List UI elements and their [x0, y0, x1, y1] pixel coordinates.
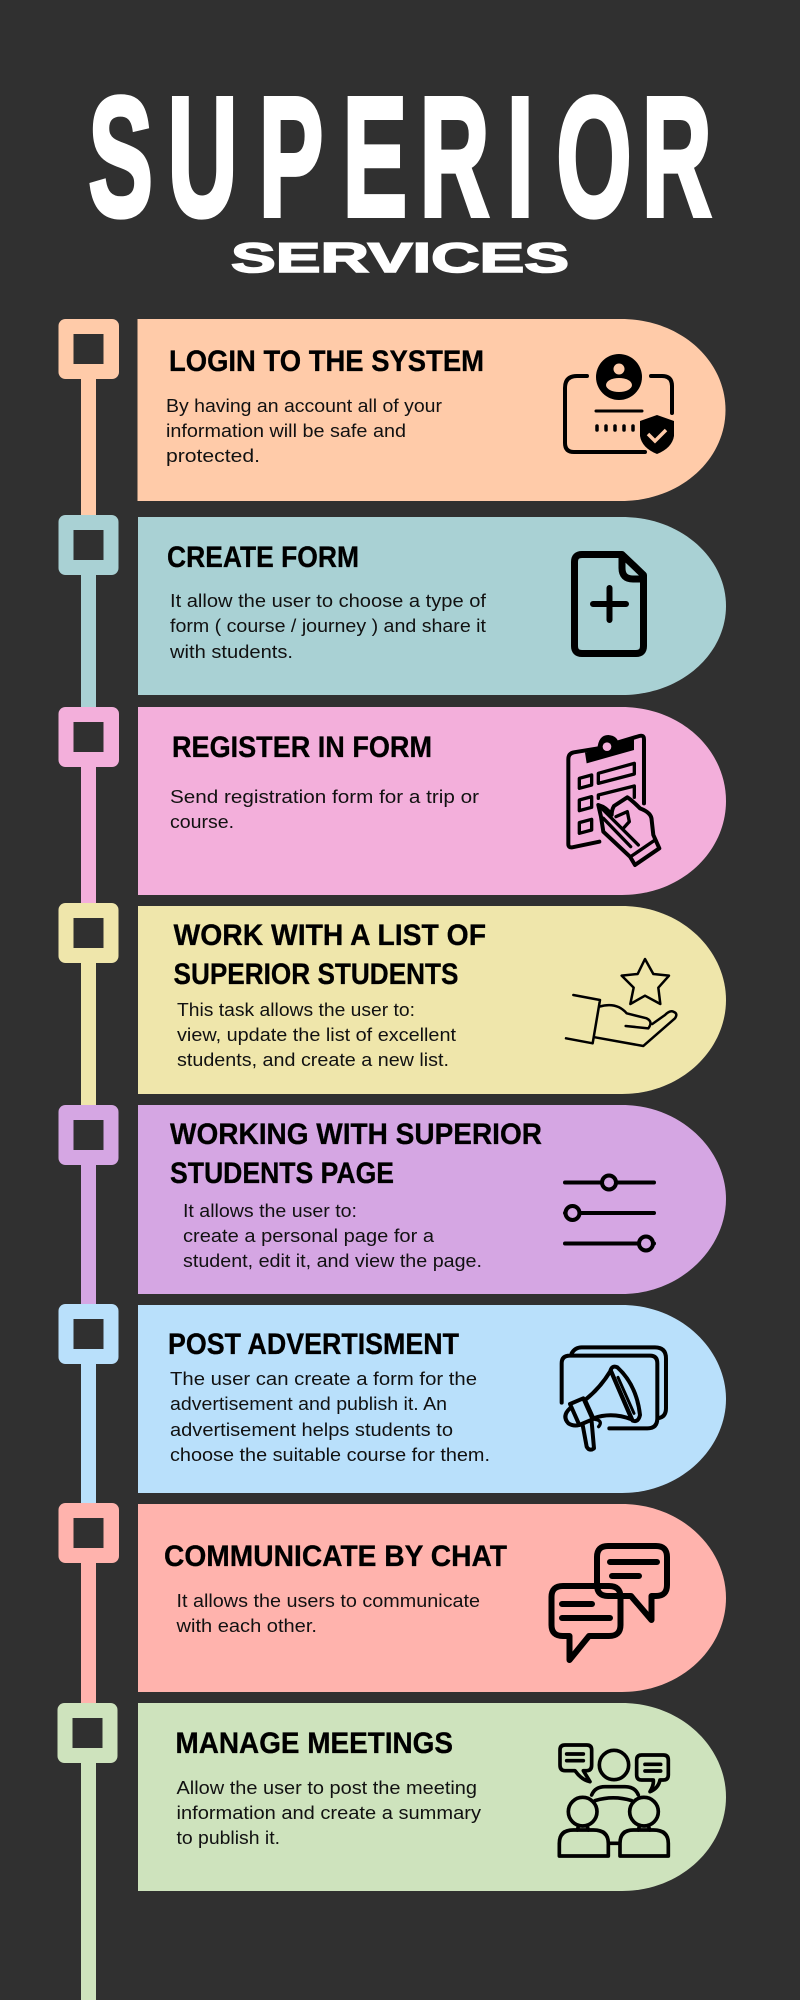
heading: STUDENTS PAGE: [170, 1157, 394, 1190]
heading: LOGIN TO THE SYSTEM: [169, 345, 484, 378]
text block: advertisement and publish it. An: [170, 1393, 447, 1414]
text block: [170, 1368, 490, 1465]
text block: with students.: [169, 641, 293, 662]
text block: Send registration form for a trip or: [170, 786, 479, 807]
text block: It allow the user to choose a type of: [170, 590, 487, 611]
heading: SUPERIOR STUDENTS: [174, 958, 458, 991]
heading: MANAGE MEETINGS: [176, 1727, 453, 1760]
icon: clipboard with writing hand: [568, 735, 659, 865]
subtitle: SERVICES: [231, 234, 569, 281]
text block: This task allows the user to:: [177, 999, 415, 1020]
icon: chat bubbles: [552, 1546, 667, 1660]
text block: The user can create a form for the: [170, 1368, 477, 1389]
icon: user account with shield: [565, 354, 674, 454]
text block: information will be safe and: [166, 420, 406, 441]
timeline node 1: [58, 319, 119, 520]
text block: create a personal page for a: [183, 1225, 435, 1246]
panel: manage meetings: [138, 1703, 726, 1891]
panel: working with superior students page: [138, 1105, 726, 1294]
panel: create form: [138, 517, 726, 695]
text block: [170, 786, 479, 832]
timeline node 2: [58, 515, 118, 710]
text block: form ( course / journey ) and share it: [170, 615, 486, 636]
timeline node 6: [58, 1304, 118, 1506]
text block: advertisement helps students to: [170, 1419, 453, 1440]
text block: [183, 1200, 482, 1271]
timeline node 5: [58, 1105, 118, 1308]
text block: It allows the user to:: [183, 1200, 357, 1221]
icon: document with plus: [574, 554, 644, 654]
text block: choose the suitable course for them.: [170, 1444, 490, 1465]
text block: [169, 590, 487, 662]
text block: to publish it.: [176, 1827, 280, 1848]
text block: [175, 1590, 480, 1636]
text block: information and create a summary: [176, 1802, 482, 1823]
text block: [177, 999, 456, 1070]
icon: sliders: [565, 1176, 654, 1250]
text block: [176, 1777, 482, 1848]
text block: students, and create a new list.: [177, 1049, 449, 1070]
panel: work with a list of superior students: [138, 906, 726, 1094]
text block: protected.: [166, 445, 260, 466]
text block: with each other.: [175, 1615, 317, 1636]
timeline node 8: [58, 1703, 118, 2000]
panel: login to the system: [138, 319, 726, 501]
title: SUPERIOR: [88, 63, 712, 252]
heading: CREATE FORM: [167, 541, 359, 574]
text block: It allows the users to communicate: [176, 1590, 480, 1611]
timeline node 7: [58, 1503, 119, 1706]
heading: COMMUNICATE BY CHAT: [164, 1540, 507, 1573]
panel: register in form: [138, 707, 726, 895]
heading: POST ADVERTISMENT: [168, 1328, 459, 1361]
icon: hand holding star: [566, 959, 676, 1046]
heading: REGISTER IN FORM: [172, 731, 432, 764]
text block: [166, 395, 442, 466]
icon: people meeting with speech bubbles: [559, 1745, 668, 1856]
timeline: [58, 319, 119, 2000]
heading: [170, 1118, 542, 1190]
timeline node 3: [58, 707, 119, 906]
text block: Allow the user to post the meeting: [176, 1777, 477, 1798]
icon: megaphone on cards: [562, 1347, 666, 1450]
heading: WORK WITH A LIST OF: [174, 919, 486, 952]
heading: [174, 919, 486, 991]
heading: WORKING WITH SUPERIOR: [170, 1118, 542, 1151]
panel: communicate by chat: [138, 1504, 726, 1692]
text block: student, edit it, and view the page.: [183, 1250, 482, 1271]
text block: view, update the list of excellent: [177, 1024, 456, 1045]
text block: By having an account all of your: [166, 395, 442, 416]
panel: post advertisment: [138, 1305, 726, 1493]
text block: course.: [170, 811, 234, 832]
timeline node 4: [58, 903, 118, 1108]
